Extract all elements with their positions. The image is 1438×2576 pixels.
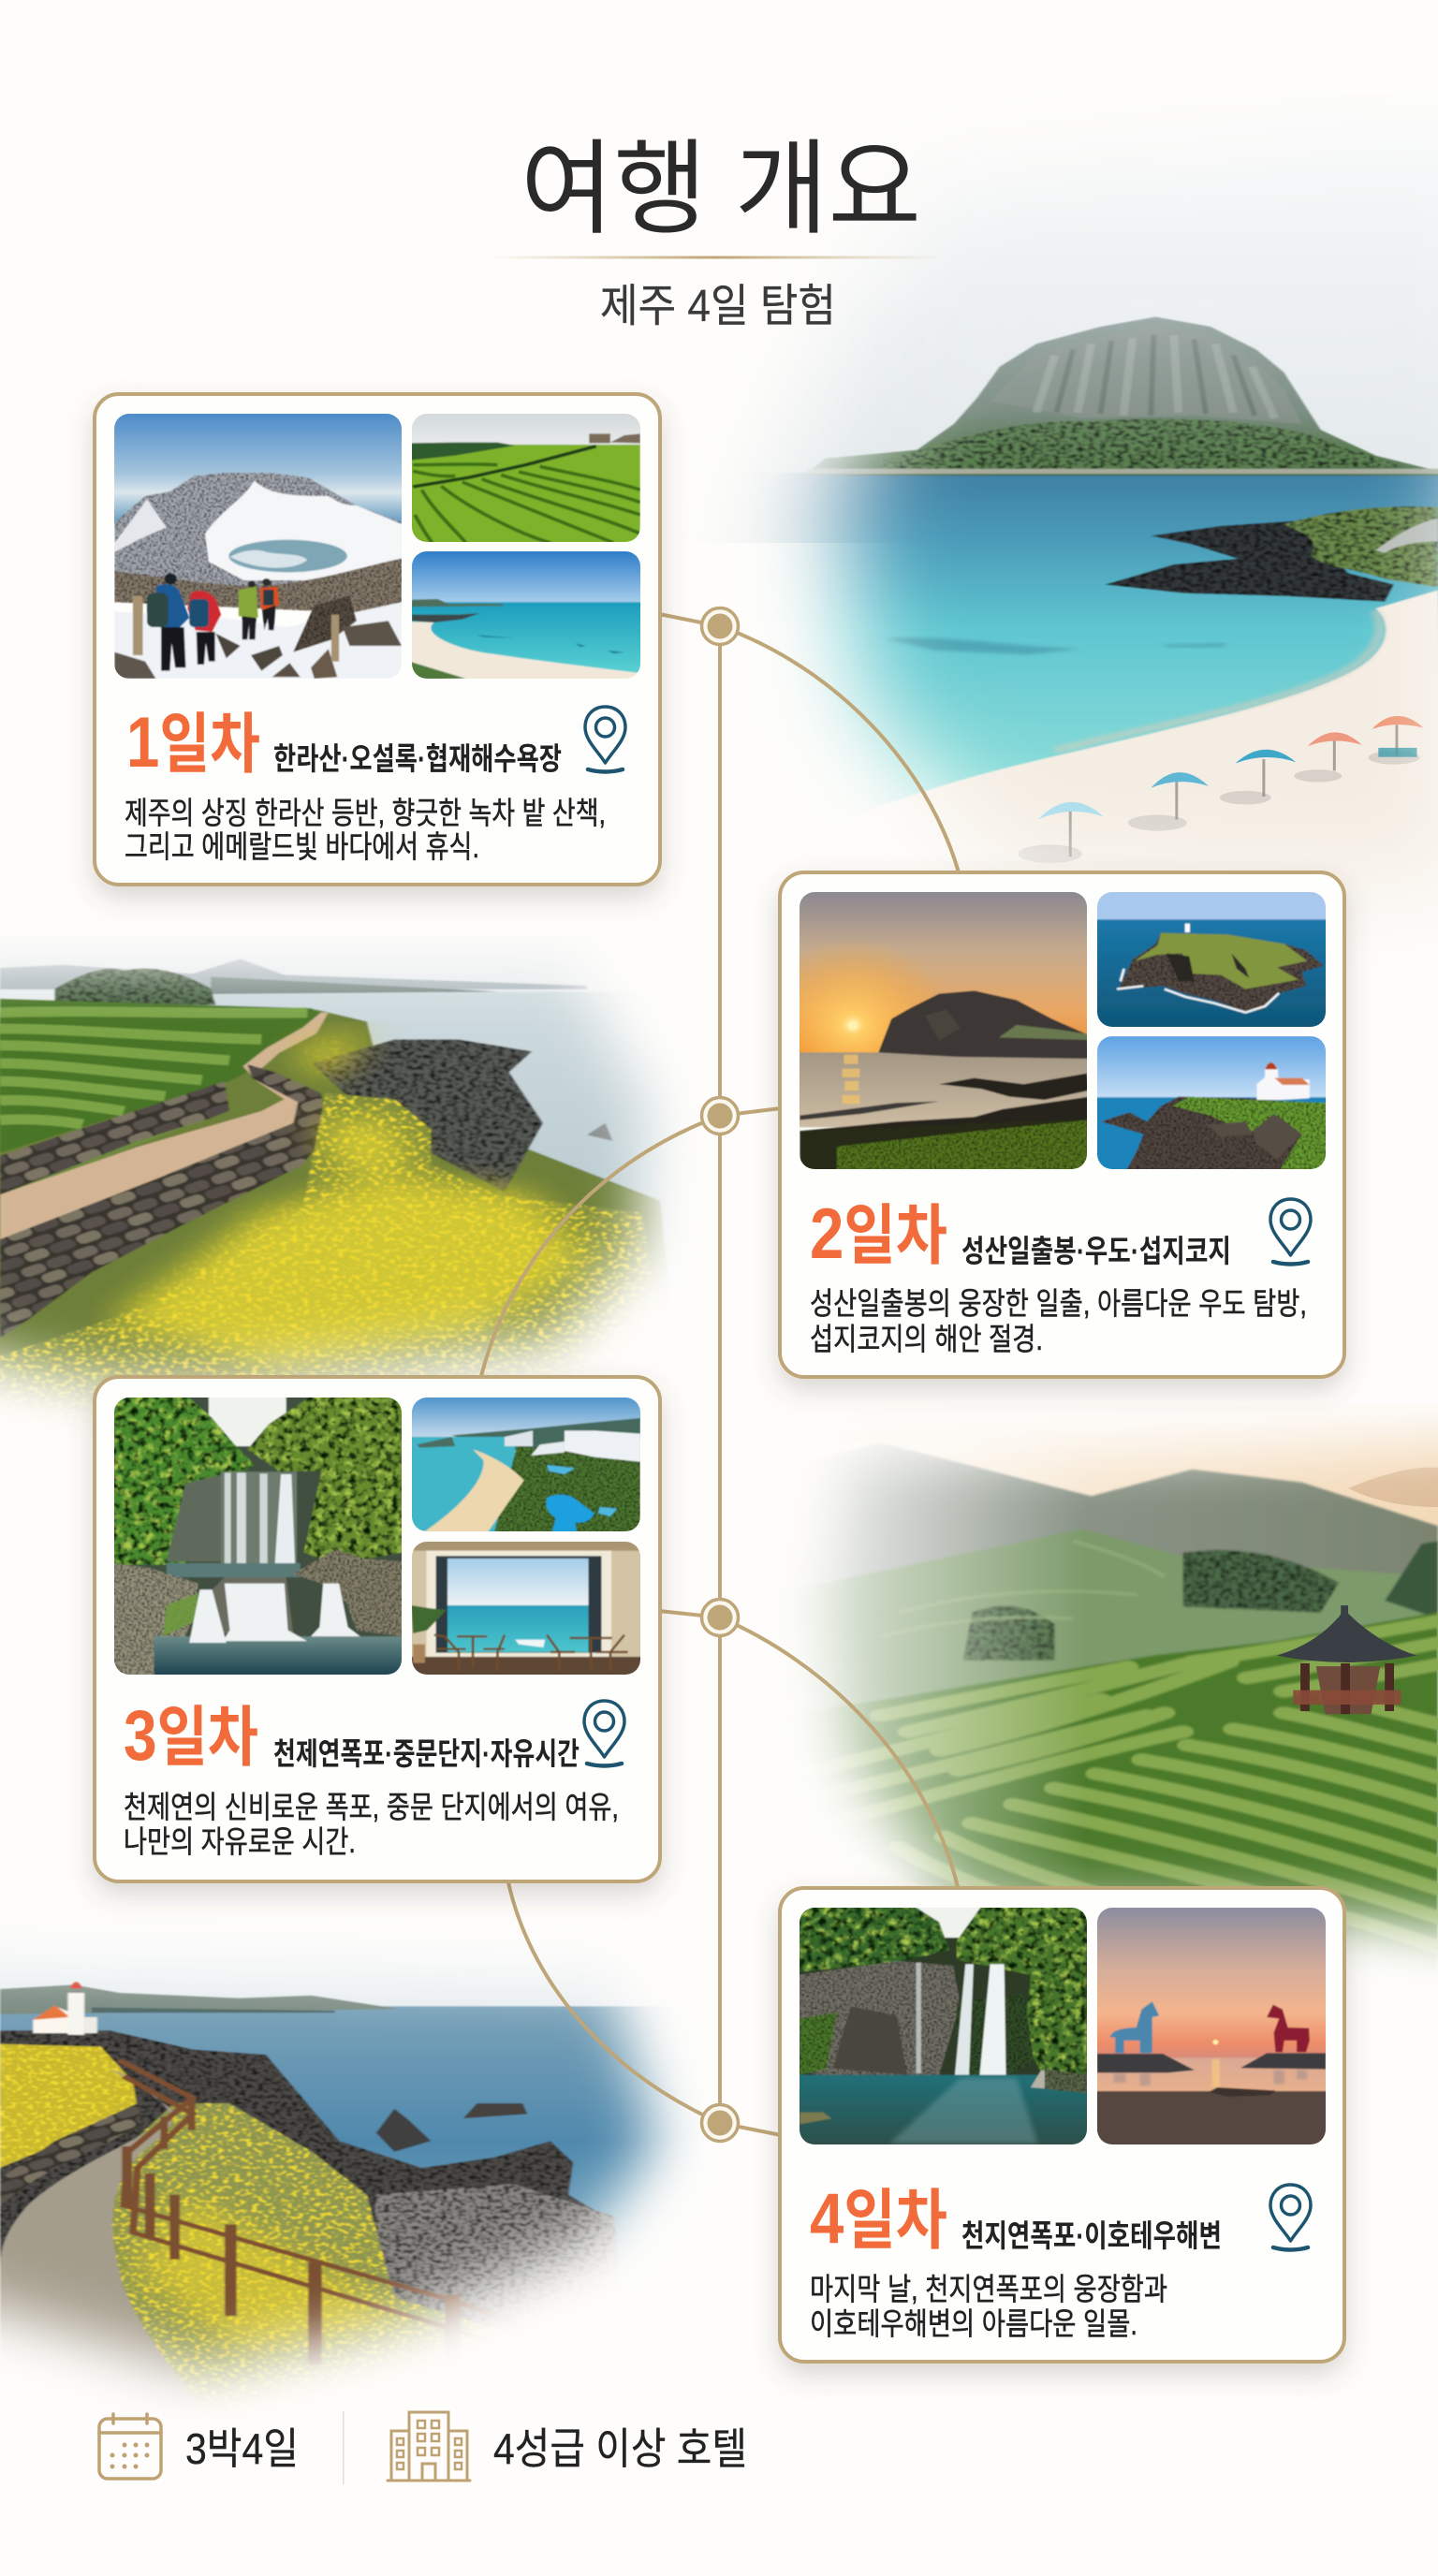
day 3 heading: 3일차 (124, 1696, 258, 1776)
label: 3 nights 4 days: 3박4일 (185, 2424, 299, 2473)
photo: Jungmun resort beach (409, 1397, 642, 1533)
photo: Cheonjiyeon waterfall (799, 1907, 1089, 2146)
background scene: tea fields, stone wall and rapeseed coast (0, 955, 673, 1421)
day 1 heading: 1일차 (126, 703, 260, 783)
photo: Cheonjeyeon waterfall (111, 1397, 404, 1677)
panel: day 1 card: 그리고 에메랄드빛 바다에서 휴식. (125, 829, 479, 864)
photo: hotel terrace ocean view (409, 1540, 642, 1677)
title (486, 132, 945, 331)
photo: green tea field (409, 412, 642, 543)
timeline connectors (481, 614, 959, 2135)
panel: day 2 card: 섭지코지의 해안 절경. (810, 1322, 1043, 1356)
day 4 places: 천지연폭포·이호테우해변 (961, 2218, 1222, 2253)
background scene: misty hills, pavilion and tea terraces (804, 1412, 1438, 1969)
panel: day 3 card: 나만의 자유로운 시간. (124, 1824, 356, 1859)
day 1 places: 한라산·오설록·협재해수욕장 (273, 741, 562, 776)
icon: beach umbrellas (1018, 716, 1423, 863)
footer: trip length (99, 2414, 299, 2479)
background scene: church, rapeseed field and coastal path (0, 1962, 692, 2408)
day 2 description: 성산일출봉의 웅장한 일출, 아름다운 우도 탐방, (810, 1286, 1307, 1321)
icon: pavilion (1277, 1605, 1416, 1714)
photo: Seopjikoji lighthouse chapel (1094, 1036, 1328, 1172)
subtitle: 제주 4일 탐험 (600, 282, 836, 331)
photo: Hallasan snow crater and hikers (113, 412, 404, 679)
panel: day 2 card (754, 872, 1344, 1377)
icon: calendar (99, 2414, 161, 2479)
photo: Seongsan sunrise (754, 891, 1089, 1170)
label: 4-star or above hotels: 4성급 이상 호텔 (493, 2424, 747, 2473)
title: 여행 개요 (521, 132, 921, 247)
photo: Iho Teu horse lighthouses at sunset (1094, 1907, 1328, 2145)
photo: Udo island aerial (1094, 891, 1328, 1029)
day 4 description: 마지막 날, 천지연폭포의 웅장함과 (810, 2272, 1167, 2306)
timeline nodes (702, 608, 738, 2142)
panel: day 1 card (95, 394, 660, 885)
panel: day 4 card (780, 1888, 1344, 2362)
photo: Hyeopjae emerald beach (409, 550, 642, 681)
day 3 places: 천제연폭포·중문단지·자유시간 (273, 1736, 580, 1771)
footer: hotel grade (388, 2412, 747, 2481)
day 2 heading: 2일차 (810, 1194, 947, 1274)
day 2 places: 성산일출봉·우도·섭지코지 (961, 1234, 1231, 1268)
day 4 heading: 4일차 (810, 2179, 947, 2259)
panel: day 3 card (95, 1377, 660, 1881)
background scene: Sanbangsan mountain and emerald beach (743, 167, 1438, 904)
icon: location pin (1270, 2185, 1311, 2250)
day 1 description: 제주의 상징 한라산 등반, 향긋한 녹차 밭 산책, (125, 796, 606, 830)
icon: location pin (585, 707, 625, 771)
icon: location pin (1270, 1199, 1311, 1264)
day 3 description: 천제연의 신비로운 폭포, 중문 단지에서의 여유, (124, 1790, 619, 1824)
icon: location pin (584, 1701, 624, 1765)
panel: day 4 card: 이호테우해변의 아름다운 일몰. (810, 2306, 1137, 2341)
icon: hotel building (388, 2412, 470, 2481)
